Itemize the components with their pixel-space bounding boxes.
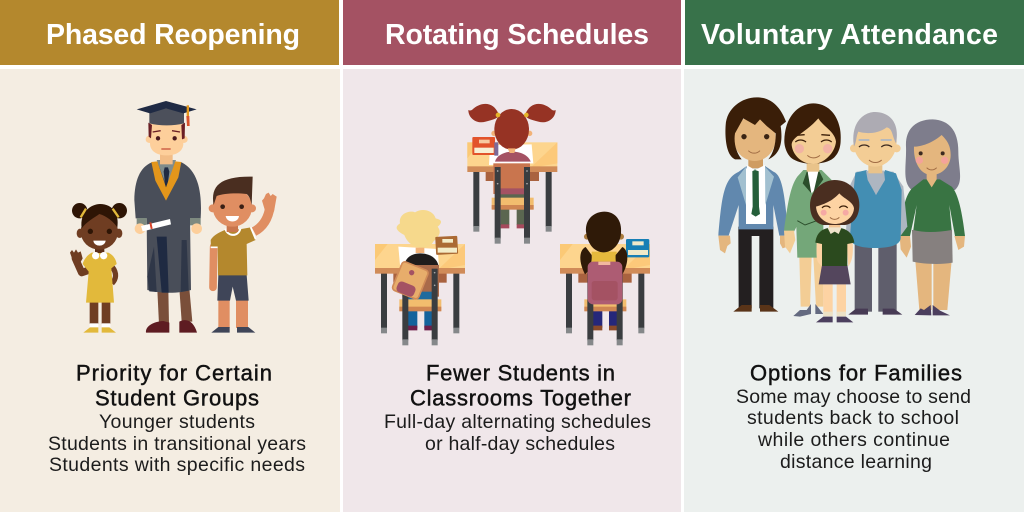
figure: waving boy <box>209 177 277 333</box>
heading bar: phased reopening <box>0 0 339 65</box>
figure: red-haired student at top desk <box>467 104 557 244</box>
figure: mother <box>784 103 841 317</box>
text block: priority for certain student groups: Students in transitional years <box>48 433 306 455</box>
text block: priority for certain student groups: Student Groups <box>95 386 259 410</box>
illustration: graduate and two children <box>70 101 277 333</box>
heading bar: phased reopening: Phased Reopening <box>46 19 300 51</box>
figure: girl in yellow dress <box>70 203 127 333</box>
text block: options for families: while others continue <box>757 429 950 451</box>
text block: fewer students in classrooms together: Full-day alternating schedules <box>384 411 651 433</box>
figure: grandmother <box>900 119 965 315</box>
text block: fewer students in classrooms together: Fewer Students in <box>426 360 615 386</box>
heading bar: voluntary attendance <box>685 0 1024 65</box>
text block: priority for certain student groups: Younger students <box>99 411 255 433</box>
figure: father <box>718 97 788 312</box>
heading bar: voluntary attendance: Voluntary Attendance <box>701 19 998 51</box>
heading bar: rotating schedules: Rotating Schedules <box>385 19 649 51</box>
figure: dark-haired student with backpack at right desk <box>560 212 650 345</box>
heading bar: rotating schedules <box>343 0 681 65</box>
figure: daughter <box>810 180 859 322</box>
text block: options for families: Options for Families <box>750 360 962 386</box>
panel: voluntary attendance <box>684 0 1024 512</box>
text block: priority for certain student groups <box>48 360 306 476</box>
figure: grandfather <box>846 112 907 315</box>
text block: fewer students in classrooms together: Classrooms Together <box>410 386 631 410</box>
panel: phased reopening <box>0 0 340 512</box>
text block: options for families <box>736 360 971 473</box>
text block: options for families: Some may choose to send <box>736 386 971 408</box>
panel: rotating schedules <box>343 0 681 512</box>
text block: fewer students in classrooms together: or half-day schedules <box>425 433 615 455</box>
text block: priority for certain student groups: Students with specific needs <box>49 454 305 476</box>
figure: graduate in gown <box>134 101 202 333</box>
illustration: family of five <box>718 97 965 322</box>
text block: fewer students in classrooms together <box>384 360 651 455</box>
text block: options for families: distance learning <box>780 451 932 473</box>
text block: options for families: students back to school <box>747 407 959 429</box>
illustration: three students at desks <box>375 104 650 345</box>
figure: blond student with backpack at left desk <box>375 210 465 345</box>
text block: priority for certain student groups: Priority for Certain <box>76 360 272 386</box>
